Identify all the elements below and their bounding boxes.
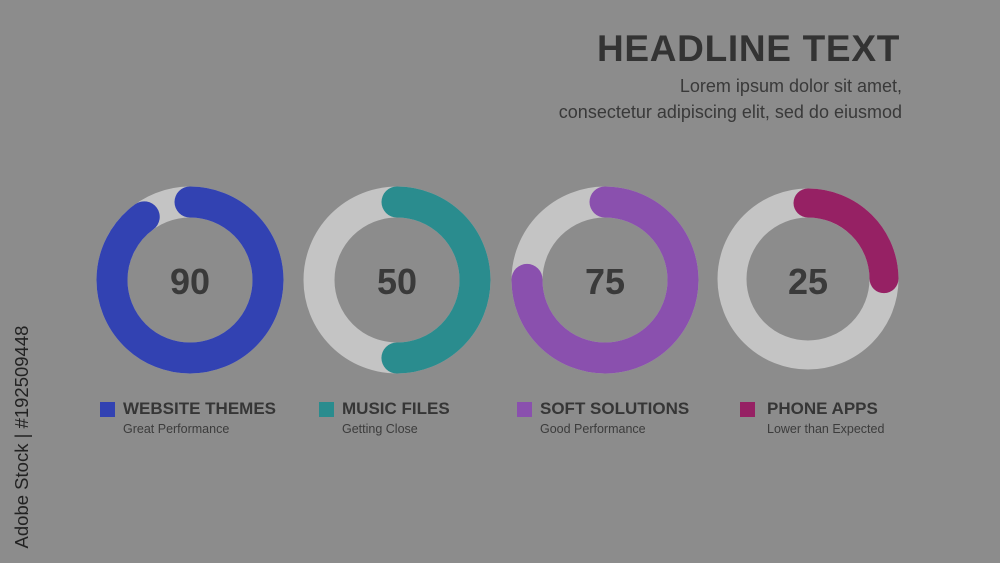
donut: 90 bbox=[112, 202, 268, 358]
text: Good Performance bbox=[540, 422, 646, 436]
legend: website themes bbox=[100, 399, 276, 436]
text: WEBSITE THEMES bbox=[123, 399, 276, 418]
donut: 25: 25 bbox=[788, 261, 828, 302]
text: PHONE APPS bbox=[767, 399, 878, 418]
text: MUSIC FILES bbox=[342, 399, 450, 418]
legend: soft solutions bbox=[517, 399, 689, 436]
donut: 75: 75 bbox=[585, 261, 625, 302]
side credit: Adobe Stock | #192509448 bbox=[11, 326, 32, 548]
text: Lower than Expected bbox=[767, 422, 884, 436]
subtitle: Lorem ipsum dolor sit amet, bbox=[680, 76, 902, 96]
text: SOFT SOLUTIONS bbox=[540, 399, 689, 418]
legend: music files bbox=[319, 399, 450, 436]
title: HEADLINE TEXT bbox=[597, 28, 900, 69]
text: Great Performance bbox=[123, 422, 229, 436]
subtitle: consectetur adipiscing elit, sed do eiusmod bbox=[559, 102, 902, 122]
donut: 25 bbox=[732, 203, 884, 355]
donut: 75 bbox=[527, 202, 683, 358]
legend: phone apps bbox=[740, 399, 884, 436]
donut: 90: 90 bbox=[170, 261, 210, 302]
subtitle bbox=[559, 76, 902, 122]
text: Getting Close bbox=[342, 422, 418, 436]
donut: 50: 50 bbox=[377, 261, 417, 302]
donut: 50 bbox=[319, 202, 475, 358]
